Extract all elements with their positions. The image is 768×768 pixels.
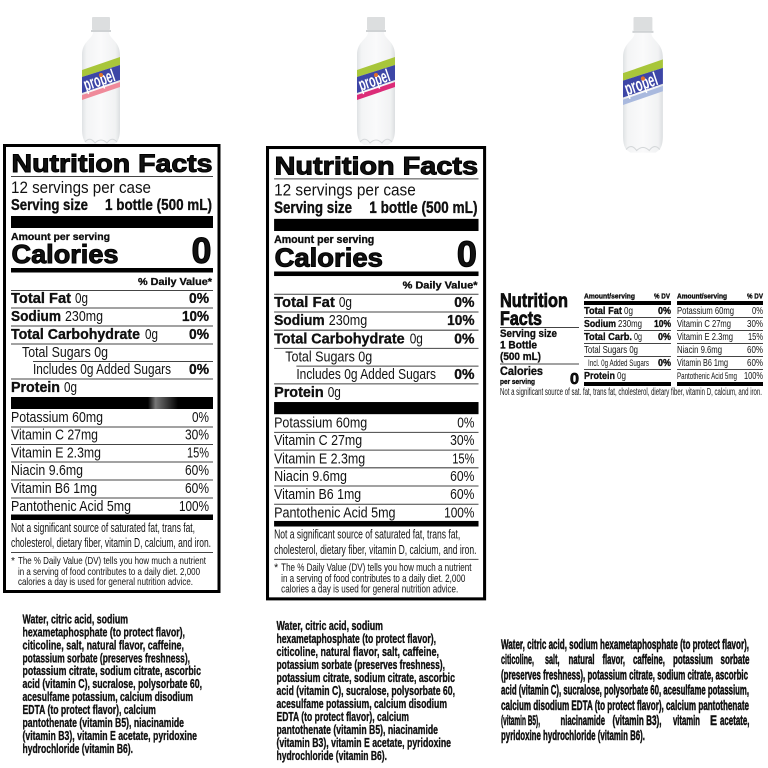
table: macronutrients column: 230mg bbox=[618, 318, 642, 330]
text block: ingredients, third flavor: potassium bbox=[673, 651, 713, 667]
table: macronutrients column: 0g bbox=[617, 370, 626, 382]
table: vitamins column: Niacin 9.6mg bbox=[677, 344, 722, 356]
table: macronutrients column: Total Fat bbox=[584, 305, 622, 317]
text block: ingredients, third flavor: flavor, bbox=[602, 651, 625, 667]
text block: ingredients, third flavor: pyridoxine hydrochloride (vitamin B6). bbox=[501, 727, 645, 743]
text: calories value: 0 bbox=[457, 233, 477, 274]
text block: ingredients, first flavor: Water, citric acid, sodium bbox=[22, 612, 128, 626]
table: vitamins and minerals: Potassium 60mg bbox=[11, 409, 103, 426]
text: calories value: Calories bbox=[275, 242, 383, 272]
text: calories value bbox=[12, 230, 212, 271]
table: macronutrients column: 0% bbox=[658, 331, 672, 343]
text: serving size: 1 bottle (500 mL) bbox=[369, 199, 478, 217]
table: macronutrients: Sodium bbox=[274, 312, 325, 329]
table: vitamins column: 30% bbox=[747, 318, 763, 330]
text: calories per serving: per serving bbox=[500, 377, 535, 386]
text block: ingredients, first flavor bbox=[22, 612, 202, 756]
text block: ingredients, second flavor: hydrochloride (vitamin B6). bbox=[276, 749, 387, 763]
table: vitamins and minerals bbox=[11, 409, 213, 515]
table: macronutrients: 0g bbox=[75, 290, 88, 307]
text: calories value: Calories bbox=[12, 239, 118, 269]
text: not a significant source note: Not a significant source of saturated fat, trans fat, bbox=[11, 520, 195, 535]
table: vitamins and minerals: 30% bbox=[185, 426, 209, 444]
text block: ingredients, second flavor: pantothenate (vitamin B5), niacinamide bbox=[276, 723, 438, 737]
icon: propel bottle, pink-striped label: propel bbox=[81, 65, 118, 95]
table: vitamins and minerals: Niacin 9.6mg bbox=[274, 468, 347, 485]
text block: ingredients, second flavor: Water, citric acid, sodium bbox=[276, 619, 383, 633]
table: macronutrients column: 0% bbox=[658, 357, 672, 369]
text block: ingredients, third flavor: vitamin bbox=[673, 712, 700, 728]
table: macronutrients: 10% bbox=[447, 312, 475, 329]
table: macronutrients column: Amount/serving bbox=[584, 294, 635, 300]
table: macronutrients: Includes 0g Added Sugars bbox=[33, 361, 171, 378]
table: vitamins column: Amount/serving bbox=[677, 294, 727, 300]
panel: nutrition facts label, second flavor bbox=[268, 148, 485, 599]
table: macronutrients: Total Sugars 0g bbox=[285, 349, 372, 366]
text: serving size: Serving size bbox=[274, 199, 352, 217]
table: macronutrients column: Sodium bbox=[584, 318, 616, 330]
table: macronutrients: 10% bbox=[182, 308, 209, 325]
table: macronutrients: Protein bbox=[11, 379, 60, 396]
text block: ingredients, first flavor: potassium sorbate (preserves freshness), bbox=[22, 651, 190, 665]
heading: Nutrition Facts: Nutrition bbox=[500, 291, 568, 312]
table: macronutrients: 0g bbox=[64, 379, 77, 396]
table: vitamins and minerals: Vitamin E 2.3mg bbox=[274, 450, 365, 467]
table: macronutrients: 0% bbox=[454, 330, 475, 347]
table: macronutrients: 0% bbox=[454, 366, 475, 383]
icon: propel bottle, pink-striped label bbox=[81, 17, 120, 145]
text block: ingredients, third flavor: natural bbox=[568, 651, 594, 667]
text block: ingredients, second flavor: acid (vitamin C), sucralose, polysorbate 60, bbox=[276, 684, 455, 698]
text block: ingredients, first flavor: EDTA (to protect flavor), calcium bbox=[22, 703, 156, 717]
table: macronutrients: 0% bbox=[189, 361, 209, 378]
text: calories value bbox=[275, 233, 477, 274]
text: serving size bbox=[274, 199, 478, 217]
table: vitamins and minerals: 15% bbox=[452, 450, 474, 467]
text: serving size bbox=[11, 197, 212, 214]
text block: ingredients, second flavor: acesulfame potassium, calcium disodium bbox=[276, 697, 447, 711]
table: macronutrients column: 0g bbox=[624, 305, 633, 317]
text block: ingredients, third flavor: (vitamin B5), bbox=[501, 712, 540, 728]
text: daily value footnote: calories a day is used for general nutrition advice. bbox=[18, 576, 193, 588]
table: macronutrients column: 0g bbox=[634, 331, 642, 343]
text: serving size: 1 bottle (500 mL) bbox=[105, 197, 212, 214]
table: vitamins and minerals: 0% bbox=[192, 409, 209, 426]
icon: propel bottle, magenta-striped label: propel bbox=[356, 65, 393, 95]
text: serving size: 1 Bottle bbox=[500, 340, 537, 352]
heading: Nutrition Facts: Nutrition Facts bbox=[12, 150, 212, 178]
text block: ingredients, first flavor: hexametaphosphate (to protect flavor), bbox=[22, 625, 185, 639]
table: vitamins column: % DV bbox=[747, 294, 763, 300]
text block: ingredients, third flavor: E bbox=[710, 712, 717, 728]
table: vitamins and minerals: Niacin 9.6mg bbox=[11, 462, 83, 479]
table: macronutrients bbox=[11, 290, 213, 396]
text block: ingredients, third flavor: caffeine, bbox=[633, 651, 665, 667]
table: macronutrients: 0g bbox=[339, 294, 352, 311]
table: vitamins and minerals: Vitamin B6 1mg bbox=[11, 480, 97, 497]
text: daily value footnote: * bbox=[11, 555, 15, 567]
text: calories value: 0 bbox=[192, 230, 212, 271]
text: calories per serving: Calories bbox=[500, 364, 543, 378]
table: macronutrients: Total Carbohydrate bbox=[274, 330, 405, 347]
panel: compact horizontal nutrition facts label, third flavor bbox=[500, 291, 763, 398]
table: macronutrients: Total Fat bbox=[274, 294, 335, 311]
table: macronutrients column: 0% bbox=[658, 305, 672, 317]
table: macronutrients: 0g bbox=[328, 384, 341, 401]
text block: ingredients, first flavor: acesulfame potassium, calcium disodium bbox=[22, 690, 193, 704]
text: serving size bbox=[500, 328, 557, 363]
text block: ingredients, first flavor: hydrochloride (vitamin B6). bbox=[22, 742, 133, 756]
text block: ingredients, first flavor: acid (vitamin C), sucralose, polysorbate 60, bbox=[22, 677, 202, 691]
text: daily value footnote: The % Daily Value (DV) tells you how much a nutrient bbox=[18, 555, 206, 567]
table: vitamins column bbox=[677, 294, 763, 386]
table: macronutrients: 0% bbox=[189, 326, 209, 343]
table: macronutrients: 0% bbox=[454, 294, 475, 311]
text block: ingredients, first flavor: citicoline, salt, natural flavor, caffeine, bbox=[22, 638, 184, 652]
icon: propel bottle, blue-striped label: propel bbox=[622, 69, 661, 100]
table: macronutrients: Protein bbox=[274, 384, 324, 401]
table: vitamins and minerals: 100% bbox=[179, 498, 209, 515]
table: vitamins column: 0% bbox=[752, 305, 763, 317]
table: vitamins and minerals: 60% bbox=[185, 480, 209, 497]
text: daily value footnote: in a serving of food contributes to a daily diet. 2,000 bbox=[18, 566, 200, 578]
table: macronutrients: 0% bbox=[189, 290, 209, 307]
text: daily value footnote bbox=[11, 555, 206, 588]
text block: ingredients, second flavor: EDTA (to protect flavor), calcium bbox=[276, 710, 409, 724]
table: macronutrients: 0g bbox=[410, 330, 423, 347]
icon: propel bottle, blue-striped label bbox=[622, 17, 663, 153]
text block: ingredients, second flavor: (vitamin B3), vitamin E acetate, pyridoxine bbox=[276, 736, 451, 750]
table: vitamins and minerals: 60% bbox=[185, 462, 209, 479]
table: macronutrients column: % DV bbox=[654, 294, 670, 300]
text: daily value footnote: The % Daily Value (DV) tells you how much a nutrient bbox=[281, 562, 471, 574]
table: macronutrients: 230mg bbox=[329, 312, 367, 329]
text: not a significant source note: cholesterol, dietary fiber, vitamin D, calcium, and iron. bbox=[274, 542, 476, 557]
text: not a significant source note bbox=[274, 527, 476, 557]
text: calories per serving: 0 bbox=[570, 371, 579, 388]
text: not a significant source note: Not a significant source of saturated fat, trans fat, bbox=[274, 527, 460, 542]
text block: ingredients, second flavor: hexametaphosphate (to protect flavor), bbox=[276, 632, 436, 646]
table: macronutrients column: Total Carb. bbox=[584, 331, 632, 343]
panel: nutrition facts label, first flavor bbox=[4, 146, 219, 592]
table: vitamins and minerals: Vitamin C 27mg bbox=[11, 426, 98, 444]
heading: Nutrition Facts: Facts bbox=[500, 309, 542, 330]
text: not a significant source note: cholesterol, dietary fiber, vitamin D, calcium, and iron. bbox=[11, 535, 211, 550]
text: serving size: Serving size bbox=[11, 197, 88, 214]
table: vitamins column: Vitamin E 2.3mg bbox=[677, 331, 733, 343]
text: not a significant source note bbox=[11, 520, 211, 550]
text block: ingredients, second flavor: potassium citrate, sodium citrate, ascorbic bbox=[276, 671, 455, 685]
heading: Nutrition Facts: Nutrition Facts bbox=[275, 152, 478, 180]
table: vitamins column: Vitamin B6 1mg bbox=[677, 357, 728, 369]
table: macronutrients column bbox=[584, 294, 672, 386]
heading: Nutrition Facts bbox=[500, 291, 568, 330]
text: amount per serving: Amount per serving bbox=[274, 234, 374, 246]
table: vitamins column: 60% bbox=[747, 344, 763, 356]
table: vitamins and minerals: 60% bbox=[450, 486, 474, 503]
text block: ingredients, second flavor: potassium sorbate (preserves freshness), bbox=[276, 658, 445, 672]
text block: ingredients, third flavor: salt, bbox=[545, 651, 560, 667]
table: macronutrients: Total Sugars 0g bbox=[22, 344, 108, 361]
table: vitamins and minerals: 100% bbox=[444, 504, 474, 521]
text: daily value footnote: calories a day is used for general nutrition advice. bbox=[281, 583, 458, 595]
text block: ingredients, second flavor: citicoline, natural flavor, salt, caffeine, bbox=[276, 645, 439, 659]
table: vitamins and minerals: Potassium 60mg bbox=[274, 414, 367, 431]
table: macronutrients: Includes 0g Added Sugars bbox=[296, 366, 436, 383]
table: vitamins and minerals: 30% bbox=[450, 432, 474, 449]
icon: propel bottle, magenta-striped label bbox=[356, 17, 395, 145]
text block: ingredients, first flavor: (vitamin B3), vitamin E acetate, pyridoxine bbox=[22, 729, 197, 743]
text: servings per case: 12 servings per case bbox=[274, 181, 416, 200]
text: percent daily value header: % Daily Value* bbox=[403, 281, 478, 292]
text block: ingredients, third flavor: (vitamin B3), bbox=[612, 712, 662, 728]
table: vitamins column: Potassium 60mg bbox=[677, 305, 734, 317]
table: macronutrients: 0g bbox=[145, 326, 158, 343]
table: vitamins and minerals: 0% bbox=[457, 414, 474, 431]
table: macronutrients column: Incl. 0g Added Sugars bbox=[588, 358, 649, 369]
text block: ingredients, third flavor bbox=[501, 636, 750, 743]
text: amount per serving: Amount per serving bbox=[11, 231, 110, 243]
table: macronutrients column: Total Sugars 0g bbox=[584, 344, 638, 356]
table: macronutrients column: 10% bbox=[654, 318, 672, 330]
table: macronutrients: Total Carbohydrate bbox=[11, 326, 140, 343]
text block: ingredients, first flavor: potassium citrate, sodium citrate, ascorbic bbox=[22, 664, 201, 678]
table: vitamins and minerals: Vitamin C 27mg bbox=[274, 432, 362, 449]
table: macronutrients: Total Fat bbox=[11, 290, 71, 307]
table: vitamins column: Vitamin C 27mg bbox=[677, 318, 731, 330]
table: vitamins and minerals: 60% bbox=[450, 468, 474, 485]
text block: ingredients, first flavor: pantothenate (vitamin B5), niacinamide bbox=[22, 716, 184, 730]
table: vitamins column: Pantothenic Acid 5mg bbox=[677, 371, 737, 381]
table: vitamins and minerals: Vitamin E 2.3mg bbox=[11, 444, 101, 462]
text: percent daily value header: % Daily Value* bbox=[138, 277, 212, 288]
table: vitamins column: 60% bbox=[747, 357, 763, 369]
table: macronutrients: Sodium bbox=[11, 308, 61, 325]
text: daily value footnote: in a serving of food contributes to a daily diet. 2,000 bbox=[281, 573, 465, 585]
text: serving size: Serving size bbox=[500, 328, 557, 340]
text: calories per serving bbox=[500, 364, 579, 388]
table: macronutrients: 230mg bbox=[65, 308, 103, 325]
text block: ingredients, second flavor bbox=[276, 619, 455, 763]
text block: ingredients, third flavor: citicoline, bbox=[501, 651, 534, 667]
table: vitamins and minerals: Pantothenic Acid 5mg bbox=[11, 498, 131, 515]
table: macronutrients column: Protein bbox=[584, 370, 615, 382]
table: vitamins and minerals: 15% bbox=[187, 444, 209, 462]
table: vitamins and minerals: Vitamin B6 1mg bbox=[274, 486, 361, 503]
table: vitamins and minerals: Pantothenic Acid 5mg bbox=[274, 504, 396, 521]
table: macronutrients bbox=[274, 294, 479, 401]
text: daily value footnote bbox=[274, 562, 471, 595]
text: daily value footnote: * bbox=[274, 562, 278, 574]
text: servings per case: 12 servings per case bbox=[11, 179, 151, 197]
text block: ingredients, third flavor: niacinamide bbox=[560, 712, 605, 728]
text: serving size: (500 mL) bbox=[500, 351, 541, 363]
table: vitamins and minerals bbox=[274, 414, 479, 521]
